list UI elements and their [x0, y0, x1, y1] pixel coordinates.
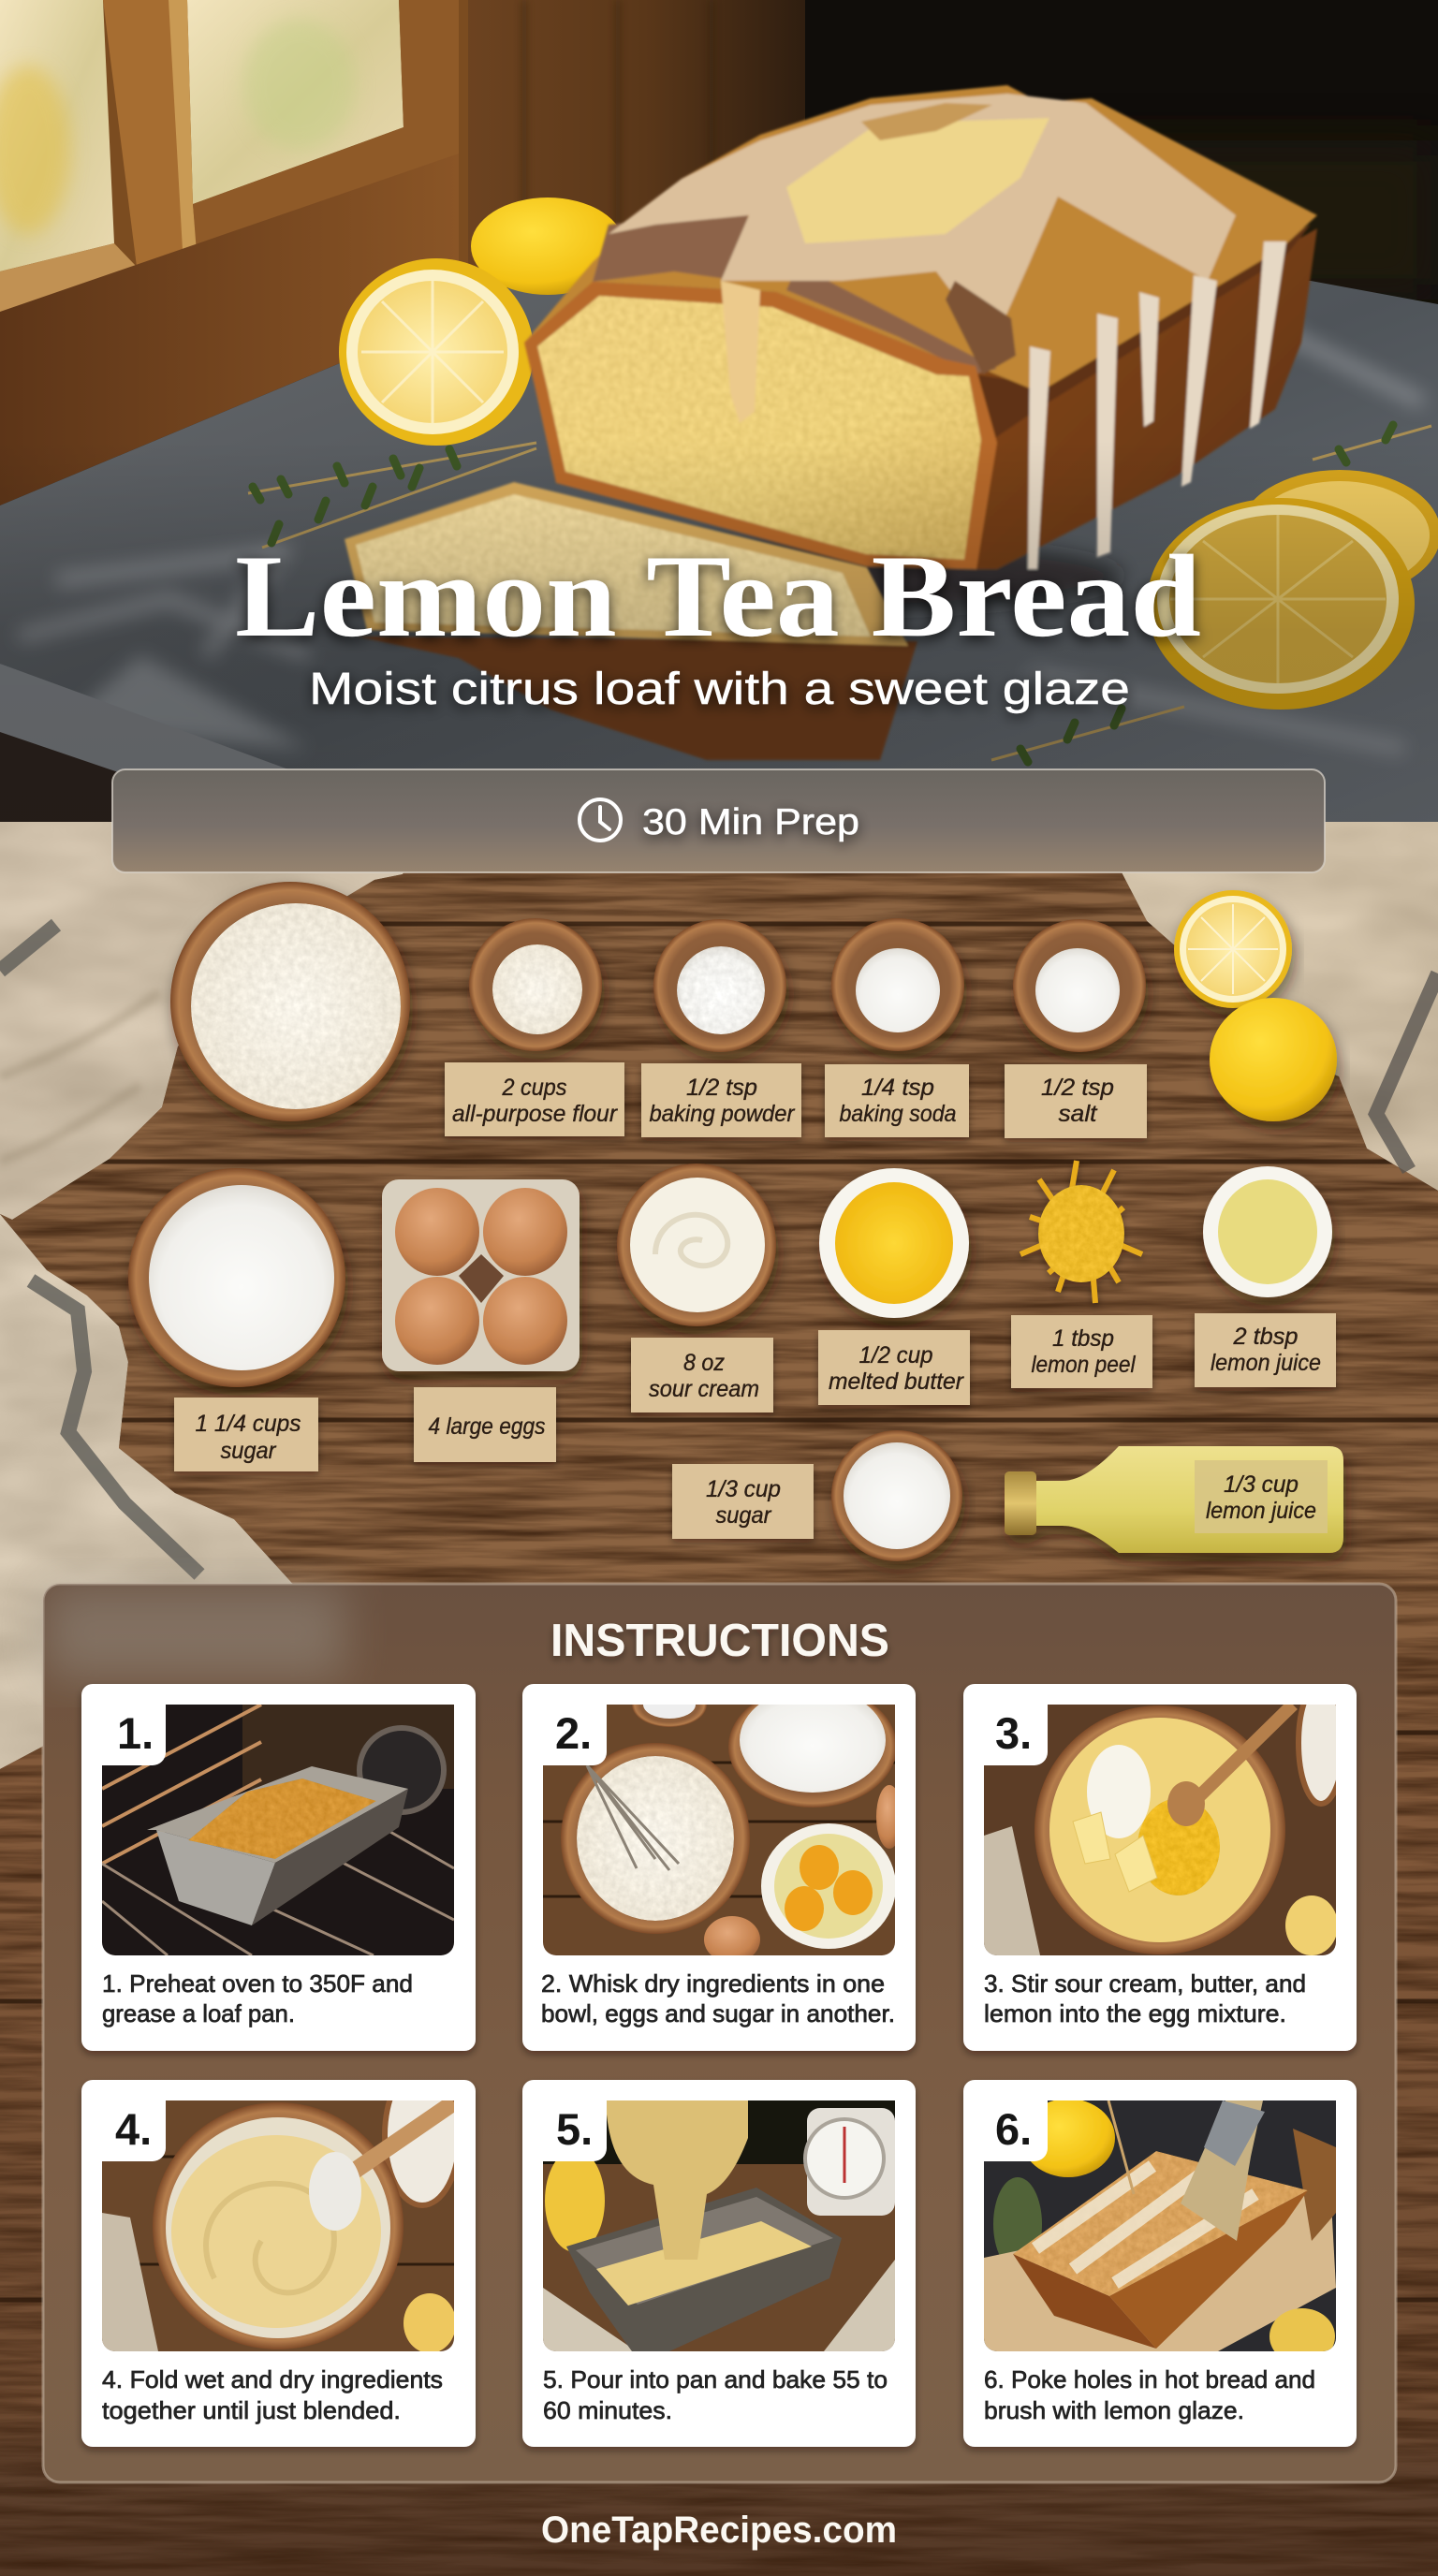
towel stripes [0, 925, 199, 1574]
label: baking soda: baking soda [839, 1101, 957, 1127]
loaf side [976, 228, 1317, 569]
label: sugar: sugar [221, 1438, 277, 1464]
hero photo: glazed lemon loaf [0, 0, 1438, 822]
ingredient: lemon zest [1020, 1161, 1142, 1303]
ingredient: salt bowl [1013, 919, 1146, 1052]
step 1 text: grease a loaf pan. [102, 1999, 295, 2027]
step 2 text [541, 1969, 895, 2027]
step 1 text [102, 1969, 413, 2027]
towel: lower left [0, 1214, 300, 1769]
step 2 number: 2. [555, 1708, 592, 1758]
ingredient: lemon juice bottle [1005, 1446, 1343, 1553]
label: sour cream [631, 1338, 773, 1412]
ingredient: lemon juice bowl [1203, 1166, 1332, 1297]
label: flour: all-purpose flour [452, 1101, 619, 1127]
right lemons [1147, 470, 1438, 710]
ingredient: whole lemon [1210, 998, 1337, 1121]
subtitle: Moist citrus loaf with a sweet glaze [309, 665, 1130, 714]
card: step 4 [81, 2065, 476, 2447]
step 5 number [543, 2100, 607, 2161]
label: baking powder: 1/2 tsp [686, 1075, 757, 1101]
label: glaze sugar: sugar [715, 1502, 772, 1529]
heading: INSTRUCTIONS [550, 1616, 889, 1666]
label: salt [1005, 1064, 1147, 1138]
towel: right [1095, 822, 1438, 1191]
ingredient: sour cream bowl [617, 1164, 776, 1326]
prep time text: 30 Min Prep [642, 802, 859, 842]
prep time bar [112, 769, 1325, 872]
step 2 text: 2. Whisk dry ingredients in one [541, 1969, 885, 1998]
label: flour [445, 1062, 624, 1136]
label: baking powder: baking powder [650, 1101, 796, 1127]
step 5 text [543, 2365, 888, 2424]
wood table background [0, 822, 1438, 2576]
ingredient: sugar bowl [128, 1168, 345, 1387]
step 5 text: 60 minutes. [543, 2396, 672, 2424]
label: baking powder [641, 1063, 801, 1137]
step 4 text: together until just blended. [102, 2396, 401, 2424]
step 3 number: 3. [995, 1708, 1032, 1758]
fallen slice [345, 482, 917, 760]
label: sugar [174, 1398, 318, 1471]
step 4 number [102, 2100, 166, 2161]
step 1 image: oven [102, 1705, 454, 1955]
step 2 number [543, 1705, 607, 1765]
label: baking soda [825, 1064, 969, 1137]
card: step 2 [522, 1682, 916, 2051]
loaf cut face [524, 282, 997, 569]
title: Lemon Tea Bread [235, 532, 1201, 662]
ingredient: lemon half [1174, 890, 1292, 1008]
step 1 number [102, 1705, 166, 1765]
footer website: OneTapRecipes.com [541, 2510, 897, 2551]
ingredient: baking soda bowl [831, 918, 964, 1051]
towels [0, 822, 1438, 1769]
step 6 number [984, 2100, 1048, 2161]
step 3 number [984, 1705, 1048, 1765]
card: step 6 [963, 2080, 1357, 2447]
label: melted butter: melted butter [829, 1368, 965, 1395]
label: baking soda: 1/4 tsp [861, 1075, 934, 1101]
loaf top [524, 85, 1317, 392]
step 5 image: pouring batter [543, 2100, 895, 2351]
label: lemon juice: 2 tbsp [1232, 1324, 1299, 1350]
step 4 text: 4. Fold wet and dry ingredients [102, 2365, 443, 2393]
step 4 number: 4. [115, 2104, 152, 2154]
label: lemon juice [1195, 1313, 1336, 1387]
step 2 text: bowl, eggs and sugar in another. [541, 1999, 895, 2027]
label: glaze sugar [672, 1464, 814, 1539]
lemons behind loaf [339, 198, 624, 446]
label: lemon peel: lemon peel [1032, 1352, 1137, 1378]
ingredient: egg carton [382, 1179, 580, 1371]
icon: clock [580, 799, 621, 841]
step 5 number: 5. [556, 2104, 593, 2154]
step 4 text [102, 2365, 443, 2424]
label: melted butter: 1/2 cup [859, 1342, 933, 1368]
label: lemon peel [1011, 1315, 1152, 1388]
label: lemon juice: lemon juice [1211, 1350, 1321, 1376]
step 6 text [984, 2365, 1315, 2424]
label: lemon peel: 1 tbsp [1052, 1325, 1114, 1352]
towel: upper left [0, 822, 431, 1220]
label: salt: 1/2 tsp [1041, 1075, 1114, 1101]
label: flour: 2 cups [502, 1075, 567, 1101]
step 1 number: 1. [117, 1708, 154, 1758]
window [0, 0, 468, 505]
label: glaze lemon juice: 1/3 cup [1224, 1471, 1299, 1498]
ingredient labels [174, 1062, 1336, 1539]
step 4 image: folding batter [102, 2065, 460, 2353]
label: eggs [414, 1387, 556, 1462]
ingredient: melted butter bowl [819, 1168, 969, 1318]
ingredient: flour bowl [170, 882, 410, 1121]
label: sour cream: sour cream [649, 1376, 759, 1402]
label: sugar: 1 1/4 cups [195, 1411, 301, 1437]
step 3 text: 3. Stir sour cream, butter, and [984, 1969, 1306, 1998]
step 5 text: 5. Pour into pan and bake 55 to [543, 2365, 888, 2393]
label: melted butter [818, 1330, 970, 1405]
step 1 text: 1. Preheat oven to 350F and [102, 1969, 413, 1998]
dark overlay behind title [0, 440, 1438, 822]
step 3 text [984, 1969, 1306, 2027]
thyme sprigs [248, 425, 1431, 762]
step 3 image: stirring batter [984, 1682, 1343, 1955]
label: salt: salt [1058, 1101, 1098, 1127]
glaze [609, 92, 1238, 316]
step 3 text: lemon into the egg mixture. [984, 1999, 1286, 2027]
label: eggs: 4 large eggs [429, 1413, 545, 1440]
card: step 5 [522, 2080, 916, 2447]
card: step 1 [81, 1684, 476, 2051]
label: glaze lemon juice [1195, 1460, 1328, 1533]
step 6 text: 6. Poke holes in hot bread and [984, 2365, 1315, 2393]
loaf [524, 85, 1317, 613]
step 2 image: whisking dry ingredients [543, 1682, 902, 1963]
marble counter [0, 281, 1438, 822]
ingredient: small sugar bowl [831, 1430, 962, 1561]
label: glaze sugar: 1/3 cup [706, 1476, 781, 1502]
glaze drips [721, 281, 760, 423]
ingredient: small flour bowl [469, 918, 602, 1051]
step 6 text: brush with lemon glaze. [984, 2396, 1244, 2424]
panel: instructions [43, 1584, 1396, 2482]
step 6 image: glazing the loaf [984, 2099, 1336, 2364]
ingredient: baking powder bowl [653, 919, 786, 1052]
step 6 number: 6. [995, 2104, 1032, 2154]
label: glaze lemon juice: lemon juice [1206, 1498, 1316, 1524]
label: sour cream: 8 oz [683, 1350, 725, 1376]
card: step 3 [963, 1682, 1357, 2051]
